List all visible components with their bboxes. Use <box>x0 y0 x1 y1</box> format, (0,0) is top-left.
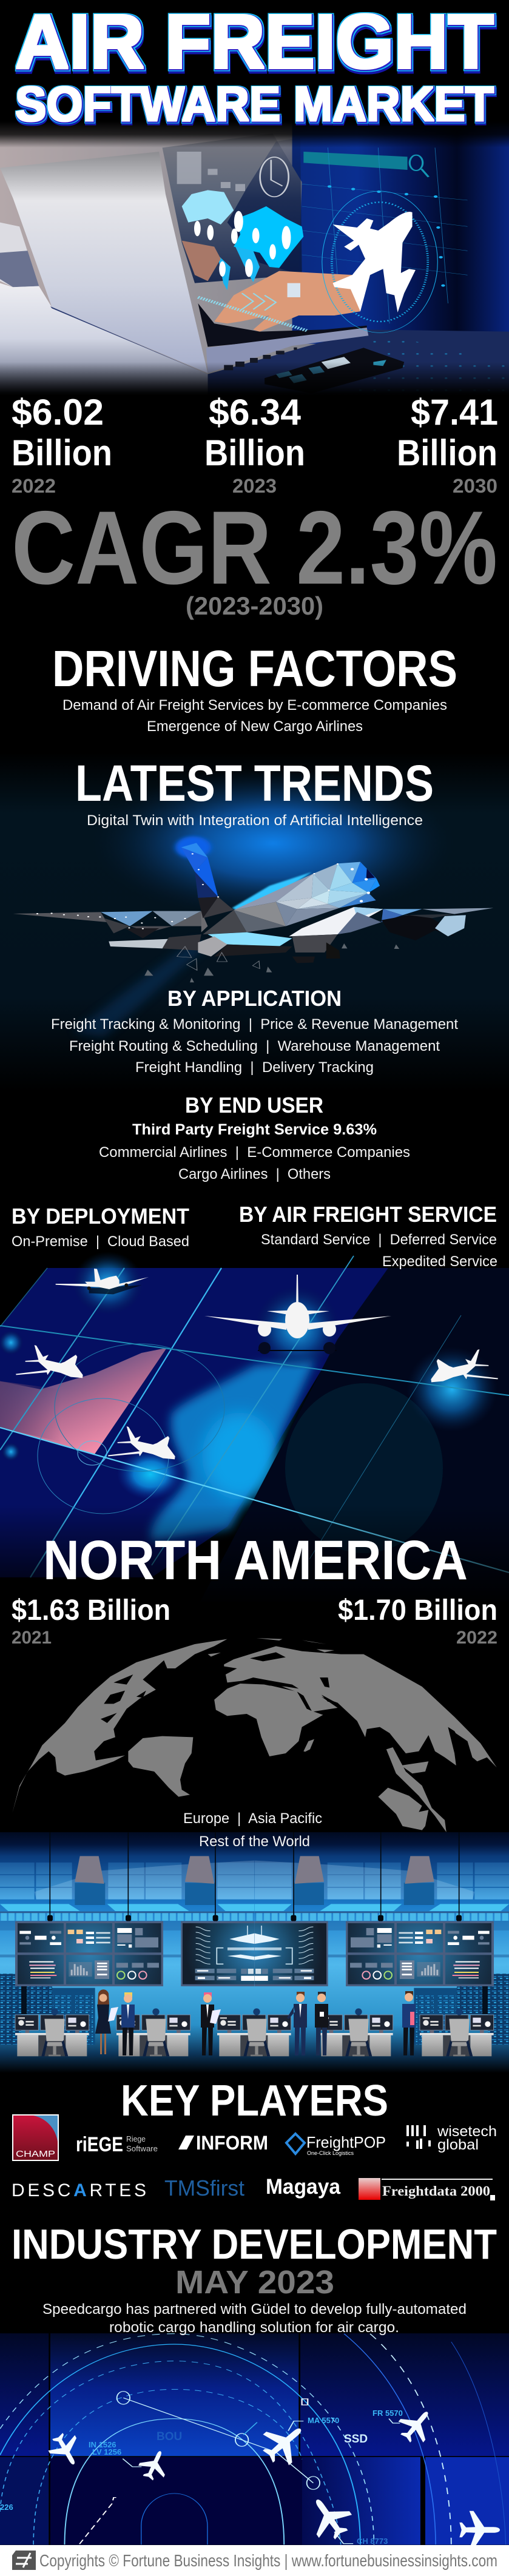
radar labels: 226 <box>0 2503 13 2512</box>
logo: FreightPOP: One-Click Logistics <box>307 2150 354 2156</box>
left wing <box>13 911 207 951</box>
north america: 2021 <box>12 1628 52 1648</box>
driving factors: Demand of Air Freight Services by E-commerce Companies <box>62 697 447 713</box>
company logos <box>12 2114 497 2200</box>
stat 2023 <box>204 392 305 497</box>
logo: Freightdata 2000 <box>359 2178 495 2200</box>
by air freight service: Expedited Service <box>382 1253 497 1270</box>
radar labels: LV 1256 <box>92 2447 121 2456</box>
driving factors: DRIVING FACTORS <box>52 640 457 697</box>
by end user: Commercial Airlines | E-Commerce Companies <box>99 1144 410 1161</box>
radar labels: MA 5570 <box>308 2416 339 2425</box>
room right half <box>255 1832 509 2045</box>
hands <box>182 241 367 347</box>
radar aircraft <box>44 2402 500 2549</box>
stat 2030: $7.41 <box>411 392 498 433</box>
industry development: MAY 2023 <box>175 2264 334 2301</box>
tail <box>181 843 234 918</box>
logo: wisetech global: wisetech <box>437 2123 497 2140</box>
stat 2023: $6.34 <box>209 392 302 433</box>
north america <box>12 1529 497 1648</box>
by application: BY APPLICATION <box>167 986 342 1011</box>
market size stats <box>12 392 498 497</box>
radar background with planes <box>0 1252 509 1608</box>
plane: right <box>431 1349 498 1382</box>
radar labels: IN 1526 <box>89 2440 116 2449</box>
control room illustration <box>0 1832 509 2073</box>
by end user: BY END USER <box>185 1093 323 1118</box>
world map <box>182 190 303 290</box>
map pins <box>194 211 291 277</box>
north america: 2022 <box>456 1628 497 1648</box>
smartphone <box>265 348 404 393</box>
latest trends: LATEST TRENDS <box>75 755 434 812</box>
radar labels: BOU <box>157 2430 182 2443</box>
seas and lakes <box>101 1652 473 1759</box>
title: AIR FREIGHT <box>16 0 494 85</box>
radar labels <box>0 2409 403 2546</box>
latest trends: Digital Twin with Integration of Artificial Intelligence <box>87 812 423 829</box>
logo: FreightPOP <box>286 2133 386 2156</box>
laptop front edge <box>206 328 368 373</box>
stat 2022: $6.02 <box>12 392 104 433</box>
by air freight service <box>239 1202 497 1270</box>
CAGR: (2023-2030) <box>186 592 323 620</box>
logo: wisetech global: global <box>437 2137 479 2153</box>
logo: Freightdata 2000: Freightdata 2000 <box>382 2183 490 2199</box>
key players heading: KEY PLAYERS <box>121 2077 388 2125</box>
by air freight service: Standard Service | Deferred Service <box>261 1232 497 1248</box>
footer <box>0 2545 509 2576</box>
fuselage <box>203 862 380 934</box>
other regions text: Rest of the World <box>199 1833 310 1850</box>
title <box>16 0 494 132</box>
constellation dots <box>36 853 370 929</box>
plane: left <box>16 1345 83 1378</box>
plane: center <box>204 1275 391 1354</box>
grid overlay <box>302 147 468 323</box>
industry development <box>12 2220 497 2336</box>
radar labels: CH 8773 <box>357 2537 388 2546</box>
plane: center left <box>108 1426 175 1459</box>
stat 2030: 2030 <box>453 475 497 497</box>
right wing <box>289 907 493 963</box>
plane: top <box>56 1269 149 1294</box>
north america: NORTH AMERICA <box>43 1529 468 1591</box>
other regions text: Europe | Asia Pacific <box>183 1810 322 1827</box>
radar screen image <box>0 2333 509 2549</box>
driving factors <box>52 640 457 735</box>
by application: Freight Handling | Delivery Tracking <box>135 1059 374 1076</box>
icon: Fortune Business Insights logo <box>12 2551 36 2570</box>
icon: white airplane <box>332 212 416 312</box>
logo: Riege <box>76 2133 158 2156</box>
radar labels: SSD <box>344 2433 368 2446</box>
room left half <box>0 1832 254 2045</box>
north america: $1.70 Billion <box>338 1594 497 1627</box>
logo: Riege: Software <box>126 2144 158 2153</box>
by end user: Third Party Freight Service 9.63% <box>132 1121 377 1138</box>
logo: Magaya: Magaya <box>266 2175 341 2199</box>
clock <box>260 157 289 197</box>
by deployment: On-Premise | Cloud Based <box>12 1233 189 1250</box>
search bar <box>303 152 428 177</box>
workstations <box>15 2008 494 2056</box>
logo: FreightPOP: FreightPOP <box>306 2133 386 2151</box>
logo: Riege: riEGE <box>76 2133 123 2156</box>
pink area <box>0 1348 167 1455</box>
by end user <box>99 1093 410 1182</box>
stat 2030: Billion <box>397 433 497 473</box>
stat 2022: Billion <box>12 433 112 473</box>
radar panels and rings <box>0 2333 509 2545</box>
gray globe map <box>12 1638 497 1832</box>
logo: DESCARTES: DESCARTES <box>12 2180 146 2200</box>
by air freight service: BY AIR FREIGHT SERVICE <box>239 1202 497 1227</box>
by deployment: BY DEPLOYMENT <box>12 1204 189 1229</box>
logo: CHAMP: CHAMP <box>16 2149 55 2159</box>
title: SOFTWARE MARKET <box>16 78 494 132</box>
driving factors: Emergence of New Cargo Airlines <box>147 718 363 735</box>
stat 2023: 2023 <box>232 475 277 497</box>
low-poly airplane <box>13 836 493 982</box>
by end user: Cargo Airlines | Others <box>178 1166 331 1182</box>
debris <box>144 943 399 982</box>
stat 2022: 2022 <box>12 475 56 497</box>
stat 2030 <box>397 392 498 497</box>
logo: CHAMP <box>12 2114 59 2161</box>
by deployment <box>12 1204 189 1250</box>
industry development: robotic cargo handling solution for air cargo. <box>109 2319 399 2336</box>
by application: Freight Tracking & Monitoring | Price & Revenue Management <box>51 1016 458 1033</box>
latest trends <box>75 755 434 829</box>
radar labels: FR 5570 <box>372 2409 403 2418</box>
stat 2023: Billion <box>204 433 305 473</box>
north america: $1.63 Billion <box>12 1594 170 1627</box>
rings <box>322 191 437 332</box>
screen tile details <box>177 152 245 191</box>
logo: INFORM: INFORM <box>196 2132 268 2154</box>
stat 2022 <box>12 392 112 497</box>
blue blobs <box>151 1359 315 1541</box>
logo: TMSfirst: TMSfirst <box>164 2176 244 2200</box>
hero image: laptop and digital map <box>0 121 509 394</box>
center belly <box>198 932 292 957</box>
other regions text <box>183 1810 322 1850</box>
latest trends glow background <box>0 752 509 1092</box>
staff <box>95 1989 416 2055</box>
by application: Freight Routing & Scheduling | Warehouse Management <box>69 1038 440 1054</box>
industry development: Speedcargo has partnered with Güdel to develop fully-automated <box>42 2301 467 2318</box>
logo: Riege: Riege <box>126 2134 146 2143</box>
by application <box>51 986 458 1076</box>
logo: wisetech global <box>406 2123 497 2153</box>
